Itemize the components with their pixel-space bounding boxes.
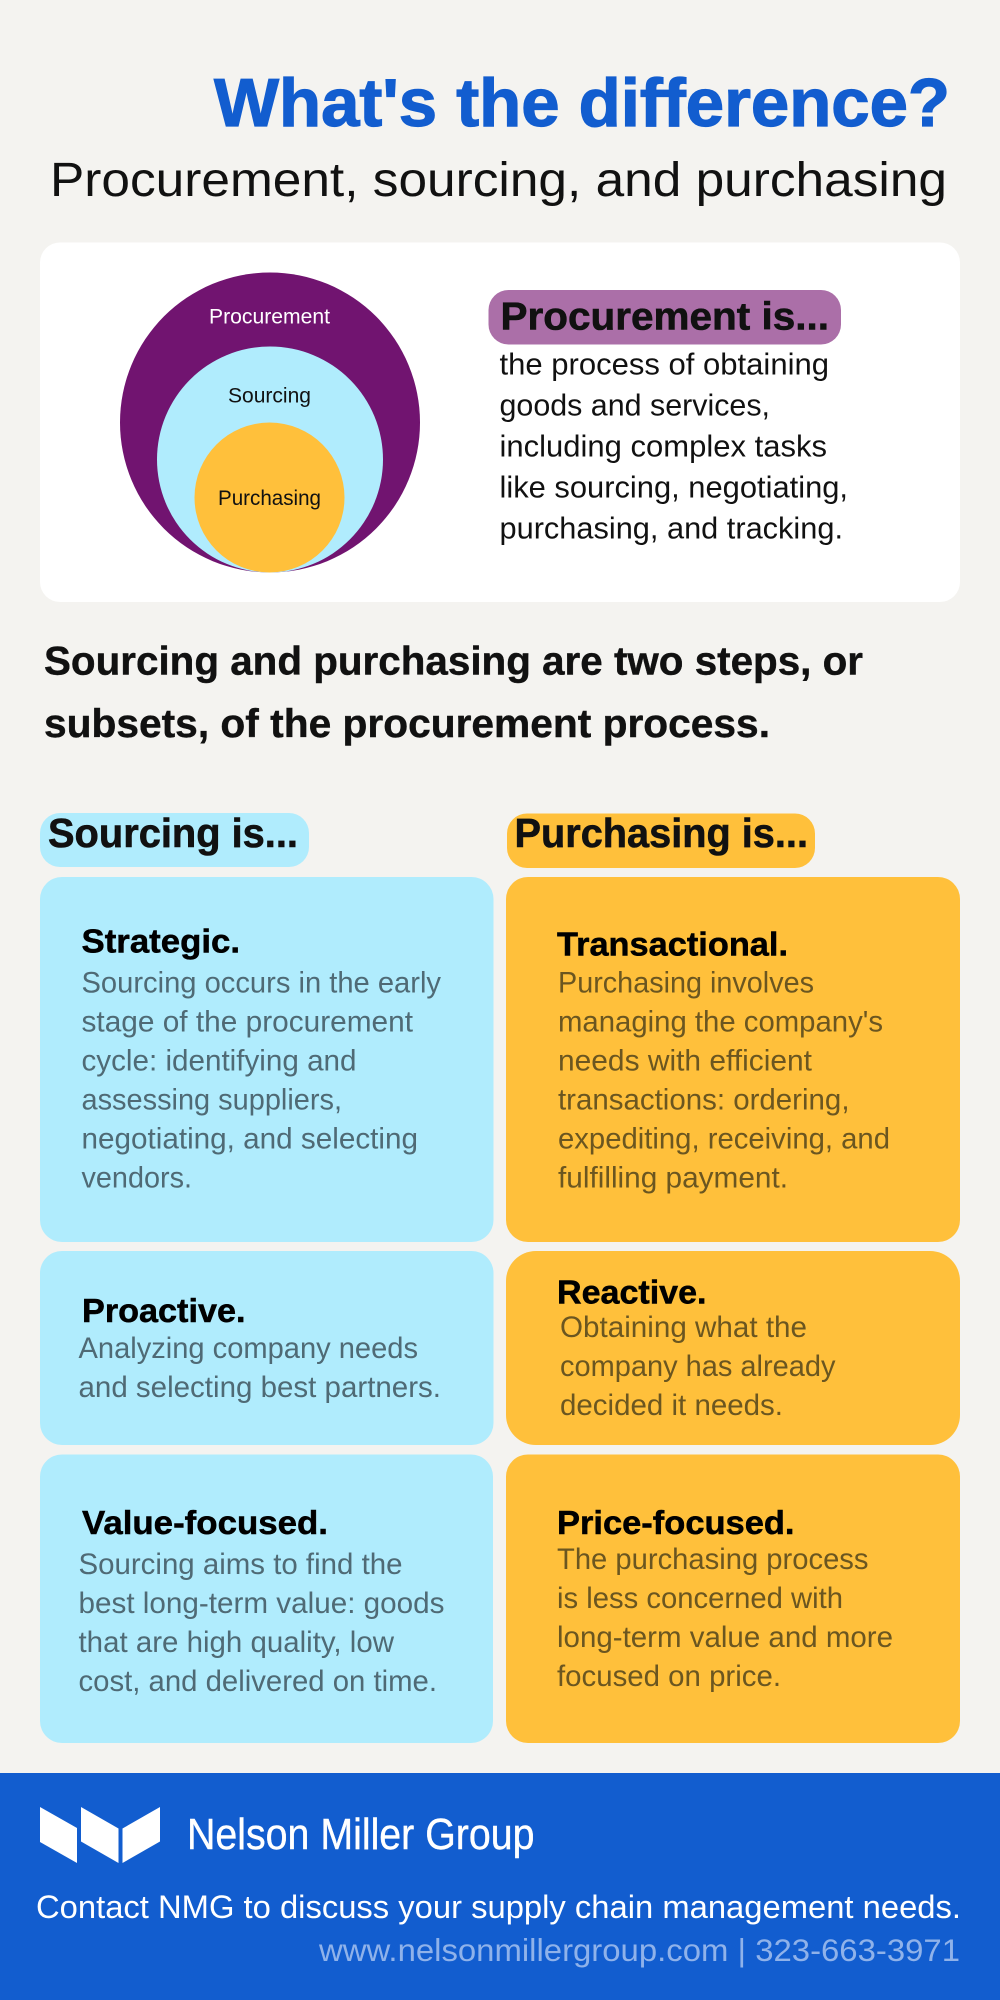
call to action: Contact NMG to discuss your supply chain management needs. [36,1889,961,1925]
panel: proactive [40,1251,494,1445]
text block: transactional description: fulfilling payment. [558,1162,788,1194]
panel: reactive [506,1251,960,1445]
text block: proactive description: and selecting best partners. [78,1371,441,1404]
text block: value-focused description: best long-term value: goods [78,1587,444,1620]
text block: value-focused description: Sourcing aims to find the [78,1548,402,1581]
text block: value-focused description: cost, and delivered on time. [78,1665,437,1698]
heading: proactive: Proactive. [82,1293,246,1330]
text block: procurement definition [500,348,848,546]
text block: transactional description: needs with efficient [558,1044,812,1078]
chart: nested circles: Sourcing [228,384,311,408]
text block: strategic description: negotiating, and selecting [82,1122,418,1156]
text block: subsets statement [44,640,863,746]
panel: price-focused [506,1454,960,1743]
text block: subsets statement: Sourcing and purchasing are two steps, or [44,640,863,684]
text block: price-focused description: is less concerned with [557,1582,843,1615]
heading: Sourcing is: Sourcing is... [48,810,298,856]
heading: strategic: Strategic. [82,924,240,960]
text block: procurement definition: including complex tasks [500,430,827,464]
text block: procurement definition: purchasing, and tracking. [500,512,843,546]
chart: nested circles [120,272,420,572]
text block: proactive description [78,1332,441,1404]
text block: reactive description: Obtaining what the [560,1311,807,1344]
text block: transactional description: managing the company's [558,1006,883,1038]
panel: value-focused [40,1454,493,1743]
text block: strategic description [82,966,441,1194]
text block: strategic description: vendors. [82,1162,192,1194]
text block: procurement definition: like sourcing, negotiating, [500,470,848,504]
title: What's the difference? [214,65,950,141]
text block: strategic description: Sourcing occurs in the early [82,966,441,1000]
heading: value-focused: Value-focused. [82,1505,328,1542]
text block: transactional description: transactions: ordering, [558,1084,850,1116]
text block: price-focused description [557,1543,893,1693]
text block: transactional description [558,966,890,1194]
text block: transactional description: expediting, receiving, and [558,1122,890,1156]
panel: procurement definition [40,242,960,602]
text block: value-focused description: that are high quality, low [78,1626,395,1659]
contact details: www.nelsonmillergroup.com | 323-663-3971 [318,1932,960,1968]
text block: strategic description: assessing suppliers, [82,1084,342,1116]
heading: Procurement is: Procurement is... [500,296,829,338]
footer [0,1773,1000,2000]
text block: strategic description: cycle: identifying and [82,1044,356,1078]
icon: Nelson Miller Group logo [40,1807,160,1863]
text block: value-focused description [78,1548,444,1698]
brand name: Nelson Miller Group [187,1810,534,1859]
text block: procurement definition: goods and services, [500,388,770,422]
text block: price-focused description: The purchasing process [557,1543,868,1576]
text block: price-focused description: long-term value and more [557,1621,893,1654]
text block: transactional description: Purchasing involves [558,966,814,1000]
text block: price-focused description: focused on price. [557,1660,781,1693]
panel: strategic [40,877,494,1242]
text block: reactive description: company has already [560,1350,836,1383]
heading: reactive: Reactive. [557,1274,706,1312]
text block: subsets statement: subsets, of the procurement process. [44,702,770,746]
text block: proactive description: Analyzing company needs [78,1332,418,1365]
heading: Purchasing is: Purchasing is... [514,810,808,856]
text block: reactive description: decided it needs. [560,1389,783,1422]
panel: transactional [506,877,960,1242]
chart: nested circles: Purchasing [218,487,321,510]
subtitle: Procurement, sourcing, and purchasing [50,154,947,207]
heading: price-focused: Price-focused. [557,1505,794,1542]
text block: procurement definition: the process of obtaining [500,348,829,382]
chart: nested circles: Procurement [209,306,330,328]
heading: transactional: Transactional. [557,926,788,964]
text block: strategic description: stage of the procurement [82,1006,413,1038]
text block: reactive description [560,1311,836,1422]
